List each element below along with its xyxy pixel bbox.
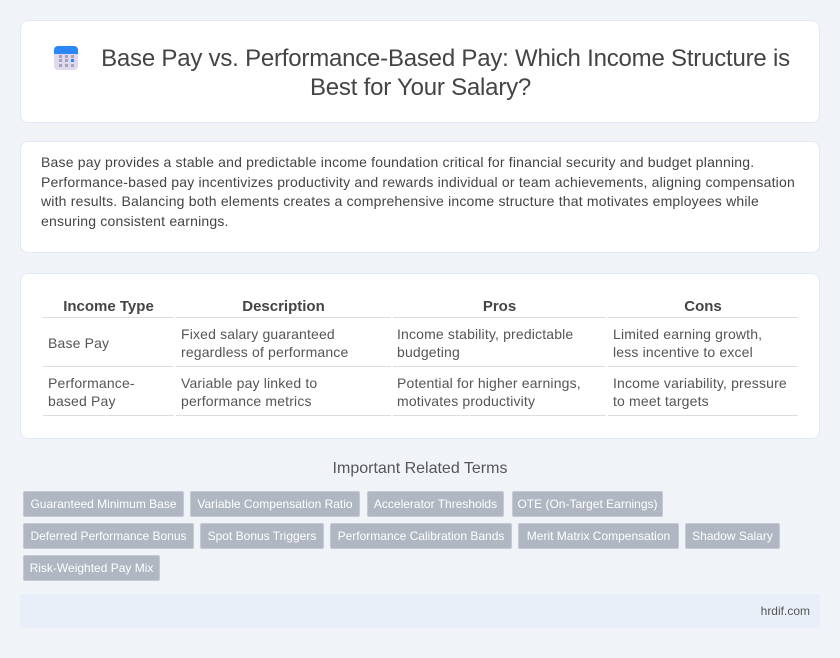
row: Base Pay cons <box>613 326 762 360</box>
heading: Important Related Terms: Important Related Terms <box>333 460 507 477</box>
row: Performance-based Pay cons: Income variability, pressure <box>613 375 787 391</box>
tag <box>190 491 360 517</box>
tag <box>23 555 160 581</box>
tag: Variable Compensation Ratio <box>197 497 353 511</box>
row: Base Pay pros: Income stability, predictable <box>397 326 573 342</box>
text block: summary: ensuring consistent earnings. <box>41 213 229 229</box>
tag: Guaranteed Minimum Base <box>30 497 177 511</box>
tag <box>330 523 512 549</box>
row: Base Pay description: Fixed salary guaranteed <box>181 326 335 342</box>
text block: summary: Base pay provides a stable and predictable income foundation critical for financial security and budget planning. <box>41 154 754 170</box>
header: Pros: Pros <box>483 298 516 315</box>
tag: Accelerator Thresholds <box>374 497 497 511</box>
tag: Deferred Performance Bonus <box>30 529 187 543</box>
header: Income Type: Income Type <box>63 298 154 315</box>
row: Base Pay type: Base Pay <box>48 335 109 351</box>
tag: OTE (On-Target Earnings) <box>517 497 658 511</box>
row: Performance-based Pay description: Variable pay linked to <box>181 375 317 391</box>
text block: summary <box>41 154 795 229</box>
row: Base Pay description: regardless of performance <box>181 344 348 360</box>
panel: comparison table <box>20 273 820 439</box>
tag <box>518 523 679 549</box>
tag: Performance Calibration Bands <box>338 529 504 543</box>
icon: calendar <box>54 46 78 70</box>
tag <box>685 523 780 549</box>
row: Performance-based Pay pros: motivates productivity <box>397 393 535 409</box>
row: Performance-based Pay type: based Pay <box>48 393 116 409</box>
title <box>101 45 790 101</box>
row: Base Pay pros: budgeting <box>397 344 460 360</box>
tag <box>23 523 194 549</box>
footer source: hrdif.com <box>761 604 810 618</box>
tag list <box>23 491 780 581</box>
row: Performance-based Pay pros: Potential for higher earnings, <box>397 375 581 391</box>
header: Description: Description <box>242 298 325 315</box>
row: Performance-based Pay description: performance metrics <box>181 393 312 409</box>
tag <box>367 491 504 517</box>
header: Cons: Cons <box>684 298 722 315</box>
row: Base Pay pros <box>397 326 573 360</box>
panel: summary <box>20 141 820 253</box>
title: Base Pay vs. Performance-Based Pay: Which Income Structure is <box>101 45 790 72</box>
footer bar <box>20 594 820 628</box>
comparison table <box>43 298 798 416</box>
tag <box>200 523 324 549</box>
row: Performance-based Pay description <box>181 375 317 409</box>
row: Performance-based Pay cons <box>613 375 787 409</box>
panel: title card <box>20 20 820 123</box>
tag <box>512 491 663 517</box>
tag: Risk-Weighted Pay Mix <box>30 561 153 575</box>
row: Performance-based Pay pros <box>397 375 581 409</box>
row: Performance-based Pay cons: to meet targets <box>613 393 709 409</box>
row: Performance-based Pay type: Performance- <box>48 375 135 391</box>
text block: summary: Performance-based pay incentivizes productivity and rewards individual or team achievements, aligning compensation <box>41 174 795 190</box>
row: Performance-based Pay type <box>48 375 135 409</box>
row: Base Pay description <box>181 326 348 360</box>
tag: Merit Matrix Compensation <box>527 529 670 543</box>
title: Best for Your Salary? <box>310 74 531 101</box>
text block: summary: with results. Balancing both elements creates a comprehensive income structure that motivates employees while <box>41 193 759 209</box>
tag: Spot Bonus Triggers <box>208 529 316 543</box>
tag <box>23 491 184 517</box>
tag: Shadow Salary <box>692 529 773 543</box>
row: Base Pay cons: Limited earning growth, <box>613 326 762 342</box>
row: Base Pay cons: less incentive to excel <box>613 344 753 360</box>
